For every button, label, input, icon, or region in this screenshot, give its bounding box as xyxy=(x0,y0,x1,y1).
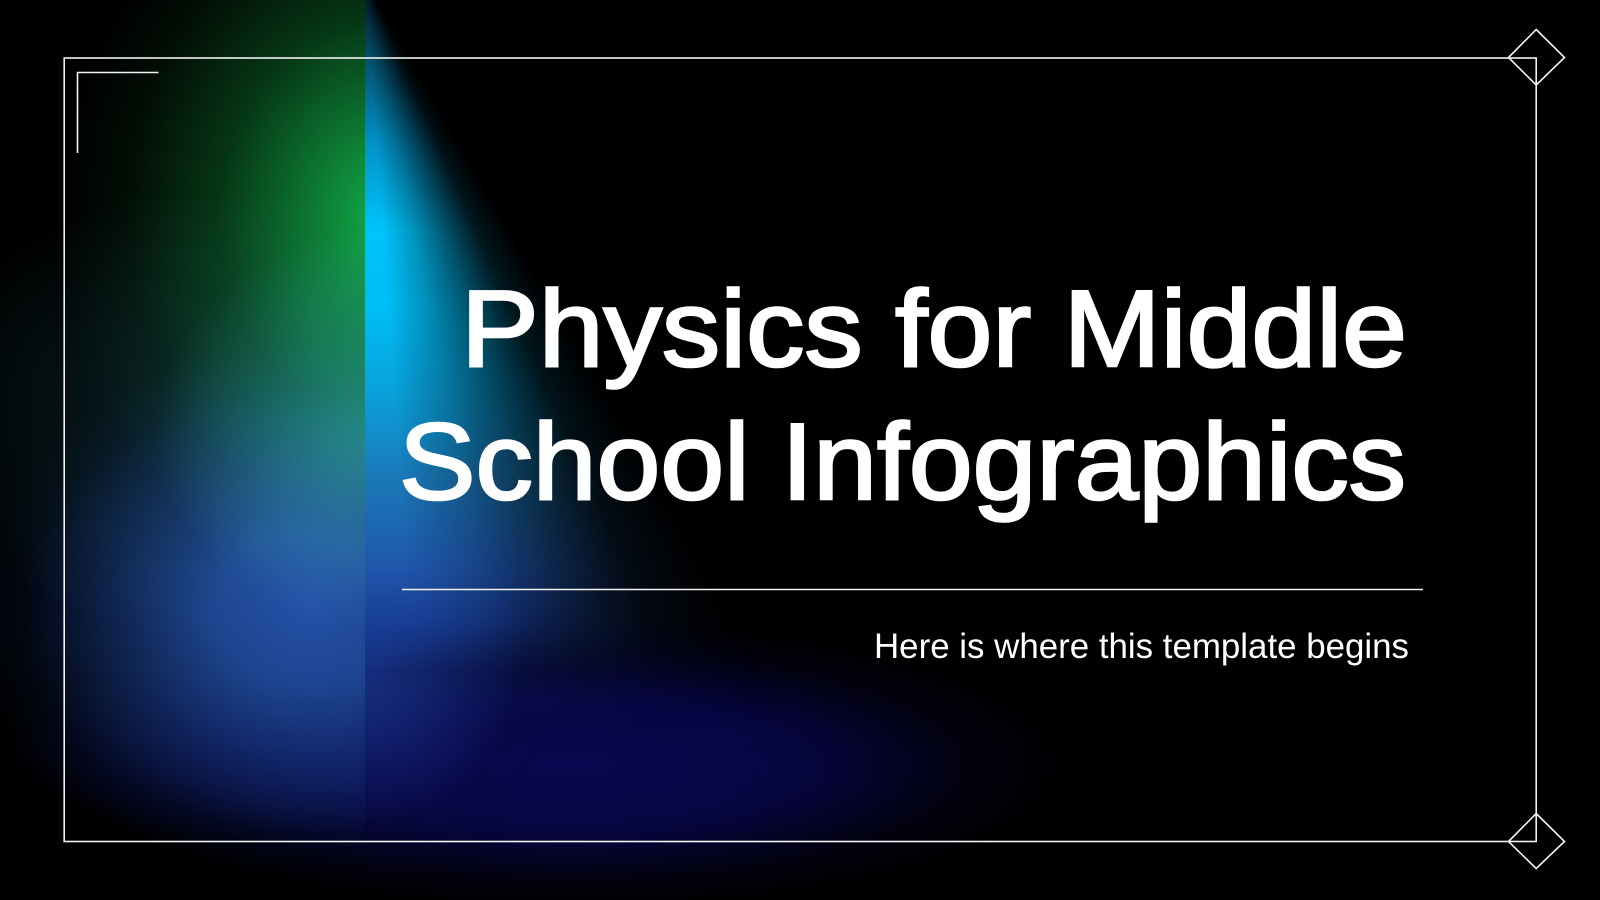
inner corner bracket xyxy=(78,72,158,153)
glow: cyan light ray xyxy=(365,0,691,692)
glow: navy haze at bottom xyxy=(0,560,1200,900)
title xyxy=(399,268,1407,523)
diamond ornament: top right xyxy=(1508,30,1564,85)
divider under title xyxy=(402,588,1423,590)
title: Physics for Middle xyxy=(461,268,1407,390)
background: green, cyan and blue light glow xyxy=(0,0,1015,894)
glow: blue column beside the edge xyxy=(365,0,725,900)
title: School Infographics xyxy=(399,401,1406,523)
diamond ornament: bottom right xyxy=(1508,814,1564,868)
glow: green to blue left panel xyxy=(0,0,365,900)
subtitle: Here is where this template begins xyxy=(874,627,1409,666)
